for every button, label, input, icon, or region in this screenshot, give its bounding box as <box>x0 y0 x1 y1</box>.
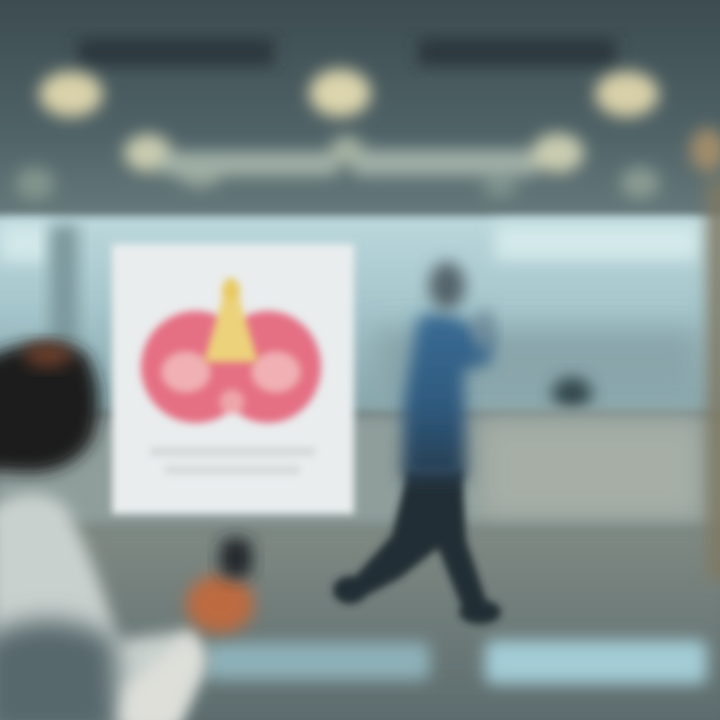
ceiling lights <box>39 69 659 117</box>
torso <box>402 313 492 480</box>
counter and floor <box>0 412 720 720</box>
hand <box>186 575 254 633</box>
legs <box>333 470 501 624</box>
sleeve <box>120 632 205 720</box>
ceiling dark panel left <box>78 38 274 66</box>
pale reflections <box>0 224 50 262</box>
left mullion <box>50 225 78 345</box>
phone <box>220 538 252 578</box>
hair <box>0 343 99 472</box>
pink lobes <box>141 311 321 423</box>
glass window band <box>0 216 720 412</box>
head <box>429 262 465 310</box>
dark object at counter <box>552 377 592 411</box>
right brown column <box>690 128 720 580</box>
lower shirt shade <box>0 620 120 720</box>
presenter <box>333 262 501 624</box>
blurred hall sign <box>15 133 660 201</box>
ceiling <box>0 0 720 218</box>
floor reflection left <box>205 642 430 680</box>
poster <box>112 244 354 514</box>
poster emblem <box>141 278 321 423</box>
floor reflection right <box>485 640 707 684</box>
foreground person <box>0 343 254 720</box>
ceiling dark panel right <box>418 38 616 66</box>
floor <box>0 525 720 720</box>
yellow figure <box>204 278 258 362</box>
distant skyline <box>375 330 700 400</box>
poster caption <box>150 447 315 474</box>
hair highlight <box>24 343 72 367</box>
counter <box>480 420 702 520</box>
shirt <box>0 494 205 720</box>
raised arm <box>473 310 495 350</box>
